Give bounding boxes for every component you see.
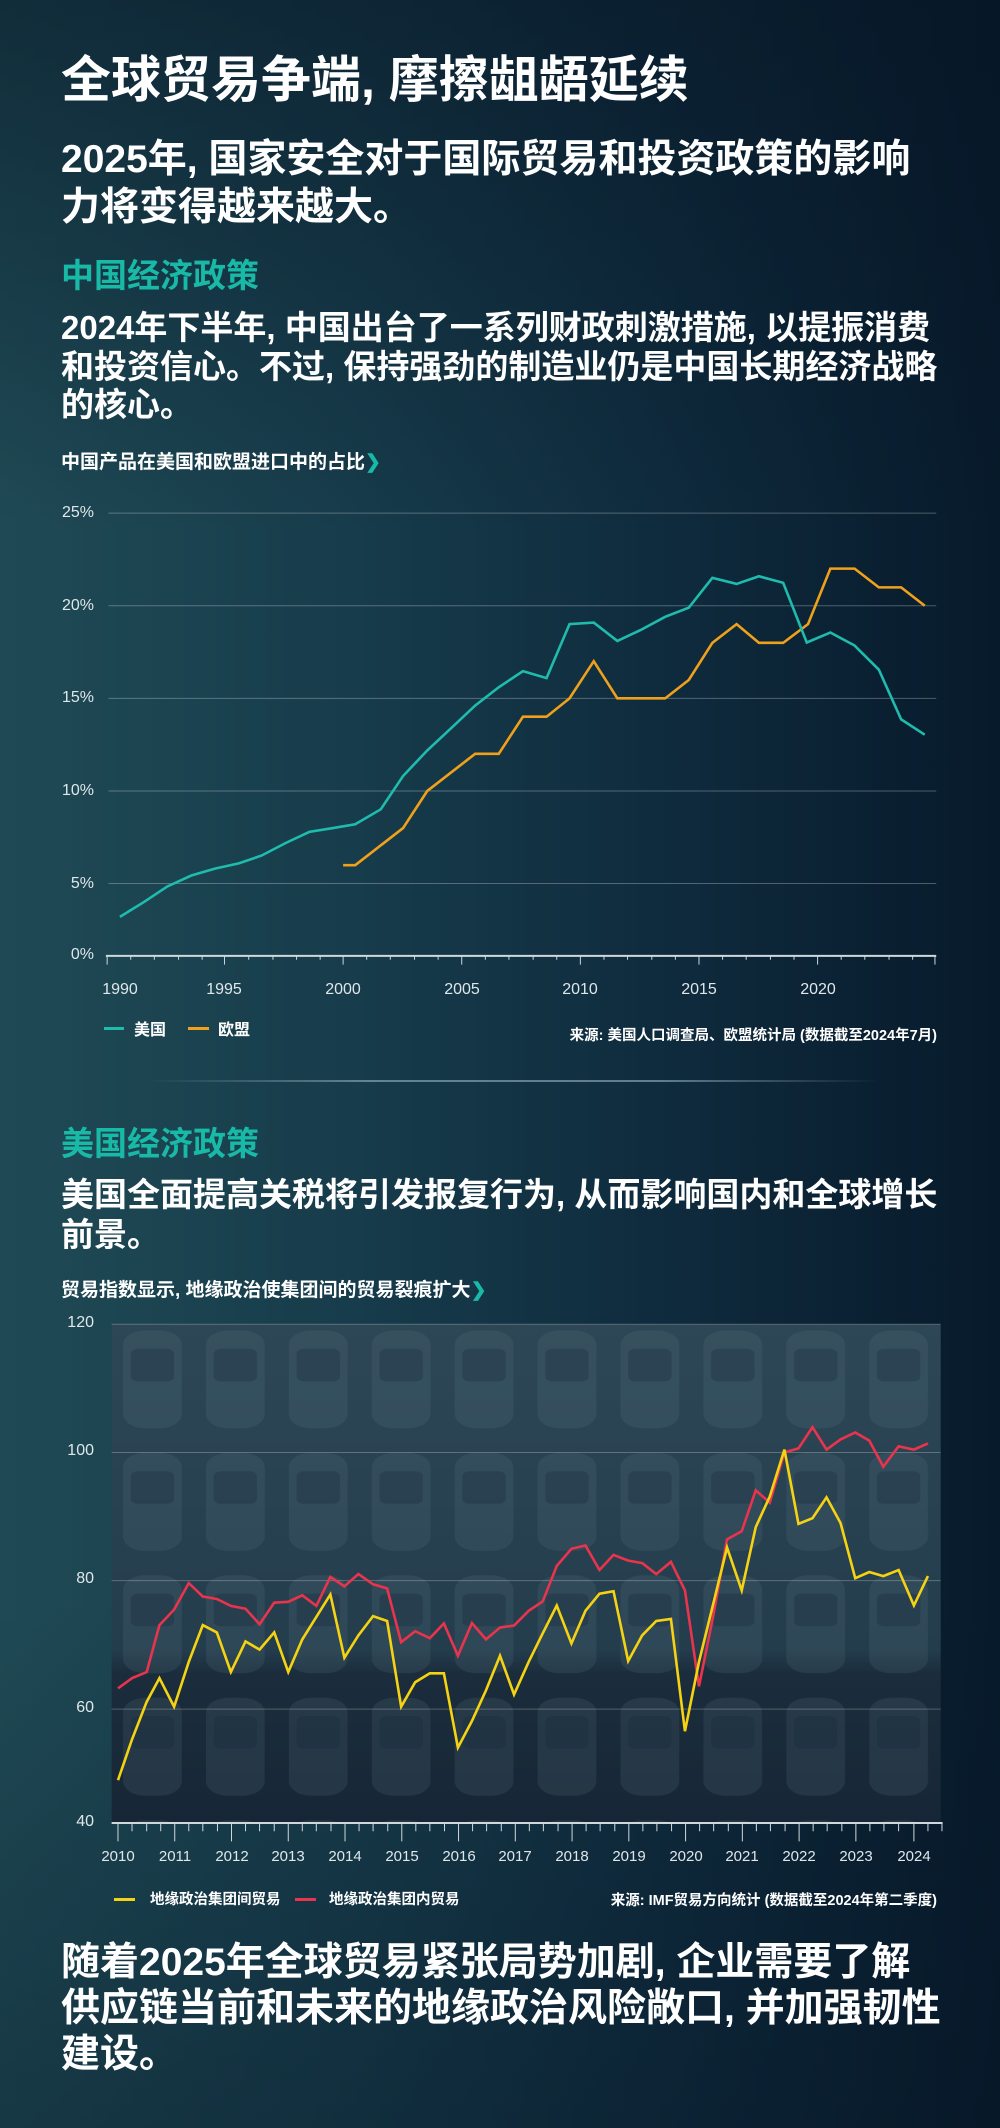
legend chart 1 [104, 1021, 250, 1039]
photo background: parked cars [112, 1324, 941, 1823]
chart 2: trade index: 2010 [101, 1848, 135, 1865]
paragraph: US [61, 1176, 937, 1253]
subtitle: 力将变得越来越大。 [61, 186, 412, 229]
line: US [120, 576, 925, 917]
paragraph: US: 前景。 [61, 1216, 160, 1253]
line: intra-bloc trade [118, 1427, 928, 1688]
chart 2: trade index: 100 [67, 1442, 94, 1459]
subtitle [61, 138, 910, 229]
line: inter-bloc trade [118, 1450, 928, 1780]
title: 全球贸易争端, 摩擦龃龉延续 [61, 52, 689, 108]
paragraph: china: 和投资信心。不过, 保持强劲的制造业仍是中国长期经济战略 [61, 348, 937, 384]
paragraph: US: 美国全面提高关税将引发报复行为, 从而影响国内和全球增长 [61, 1176, 937, 1213]
legend chart 1: 欧盟 [218, 1022, 250, 1039]
chart 2: trade index: 80 [76, 1570, 94, 1587]
chart 1: china share of imports: 2010 [562, 981, 598, 998]
chart 2 title: 贸易指数显示, 地缘政治使集团间的贸易裂痕扩大❯ [61, 1280, 486, 1301]
chart 2: trade index: 2024 [897, 1848, 931, 1865]
chart 2: trade index: 2013 [271, 1848, 305, 1865]
chart 1: china share of imports: 2005 [444, 981, 480, 998]
chart 2: trade index: 40 [76, 1813, 94, 1830]
chart 1: china share of imports: 10% [62, 782, 94, 799]
heading: US policy: 美国经济政策 [61, 1125, 259, 1162]
chart 1: china share of imports: 25% [62, 504, 94, 521]
paragraph: china [61, 309, 938, 423]
chart 2: trade index: 2015 [385, 1848, 419, 1865]
chart 2: trade index: 2023 [839, 1848, 873, 1865]
heading: china policy: 中国经济政策 [61, 257, 259, 294]
closing statement [61, 1941, 941, 2076]
chart 1: china share of imports: 20% [62, 597, 94, 614]
closing statement: 供应链当前和未来的地缘政治风险敞口, 并加强韧性 [61, 1987, 941, 2030]
chart 2: trade index: 2019 [612, 1848, 646, 1865]
paragraph: china: 2024年下半年, 中国出台了一系列财政刺激措施, 以提振消费 [61, 309, 930, 346]
legend chart 2: 地缘政治集团内贸易 [329, 1892, 460, 1908]
chart 2: trade index: 60 [76, 1699, 94, 1716]
chart 1: china share of imports: 2015 [681, 981, 717, 998]
chart 2: trade index: 2014 [328, 1848, 362, 1865]
chart 2: trade index: 2017 [498, 1848, 532, 1865]
chart 1: china share of imports [62, 504, 937, 1044]
chart 2: trade index: 2022 [782, 1848, 816, 1865]
chart 1: china share of imports: 2020 [800, 981, 836, 998]
source chart 1: 来源: 美国人口调查局、欧盟统计局 (数据截至2024年7月) [570, 1028, 937, 1044]
chart 1: china share of imports: 1995 [206, 981, 242, 998]
closing statement: 随着2025年全球贸易紧张局势加剧, 企业需要了解 [61, 1941, 910, 1984]
paragraph: china: 的核心。 [61, 386, 193, 423]
chart 2: trade index: 2021 [725, 1848, 759, 1865]
source chart 2: 来源: IMF贸易方向统计 (数据截至2024年第二季度) [611, 1893, 937, 1909]
legend chart 1: 美国 [134, 1022, 166, 1039]
chart 1: china share of imports: 15% [62, 689, 94, 706]
chart 1 title: 中国产品在美国和欧盟进口中的占比❯ [61, 452, 381, 473]
chart 2: trade index: 2012 [215, 1848, 249, 1865]
chart 2: trade index [67, 1314, 943, 1909]
closing statement: 建设。 [61, 2033, 178, 2076]
chart 2: trade index: 2011 [159, 1848, 191, 1865]
chart 1: china share of imports: 1990 [102, 981, 138, 998]
legend chart 2 [114, 1891, 460, 1908]
chart 2: trade index: 2018 [555, 1848, 589, 1865]
chart 2: trade index: 2016 [442, 1848, 476, 1865]
chart 1: china share of imports: 2000 [325, 981, 361, 998]
chart 1: china share of imports: 0% [71, 946, 94, 963]
chart 2: trade index: 120 [67, 1314, 94, 1331]
legend chart 2: 地缘政治集团间贸易 [150, 1892, 280, 1908]
subtitle: 2025年, 国家安全对于国际贸易和投资政策的影响 [61, 138, 910, 181]
line: EU [343, 569, 925, 865]
chart 2: trade index: 2020 [669, 1848, 703, 1865]
chart 1: china share of imports: 5% [71, 875, 94, 892]
